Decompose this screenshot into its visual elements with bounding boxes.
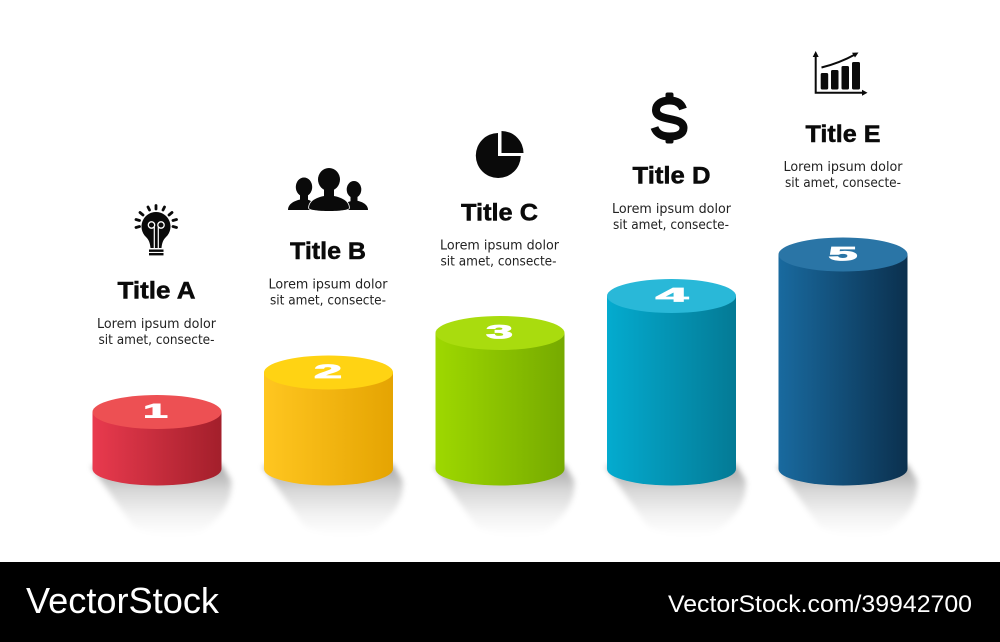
number 5: 5 <box>829 244 857 265</box>
panel: column C <box>434 131 574 536</box>
cylinder shadow D <box>606 464 746 536</box>
text block A: Lorem ipsum dolor <box>97 317 217 332</box>
panel: column D <box>606 92 746 536</box>
icon: growth chart <box>813 51 868 96</box>
icon: light bulb <box>136 206 176 255</box>
icon: people group <box>288 168 368 211</box>
text block E: Lorem ipsum dolor <box>784 160 903 175</box>
text block D: sit amet, consecte- <box>613 218 729 233</box>
footer logo text: VectorStock <box>26 580 220 621</box>
number 4: 4 <box>656 285 688 306</box>
text block D: Lorem ipsum dolor <box>612 202 732 217</box>
title B: Title B <box>290 238 366 265</box>
icon: dollar sign <box>654 92 684 144</box>
cylinder shadow C <box>434 464 574 536</box>
title D: Title D <box>632 162 710 190</box>
number 1: 1 <box>143 400 168 422</box>
footer url text: VectorStock.com/39942700 <box>668 591 972 618</box>
title A: Title A <box>118 278 196 304</box>
panel: column E <box>777 51 917 536</box>
panel: column A <box>91 206 231 536</box>
number 2: 2 <box>314 361 342 383</box>
title C: Title C <box>461 200 538 226</box>
cylinder shadow A <box>91 464 231 536</box>
cylinder C <box>436 316 564 486</box>
cylinder shadow B <box>262 464 403 536</box>
cylinder A <box>92 395 222 486</box>
title E: Title E <box>806 121 880 148</box>
text block A: sit amet, consecte- <box>98 333 215 348</box>
text block E: sit amet, consecte- <box>785 176 901 191</box>
text block C: Lorem ipsum dolor <box>440 238 560 254</box>
number 3: 3 <box>486 321 513 343</box>
icon: pie chart <box>476 131 524 178</box>
cylinder shadow E <box>777 464 917 536</box>
text block B: Lorem ipsum dolor <box>268 278 388 292</box>
cylinder D <box>607 279 736 486</box>
footer bar <box>0 562 1000 642</box>
panel: column B <box>262 168 403 536</box>
text block B: sit amet, consecte- <box>270 294 386 308</box>
text block C: sit amet, consecte- <box>440 254 557 270</box>
cylinder B <box>264 356 393 486</box>
cylinder E <box>778 238 908 486</box>
